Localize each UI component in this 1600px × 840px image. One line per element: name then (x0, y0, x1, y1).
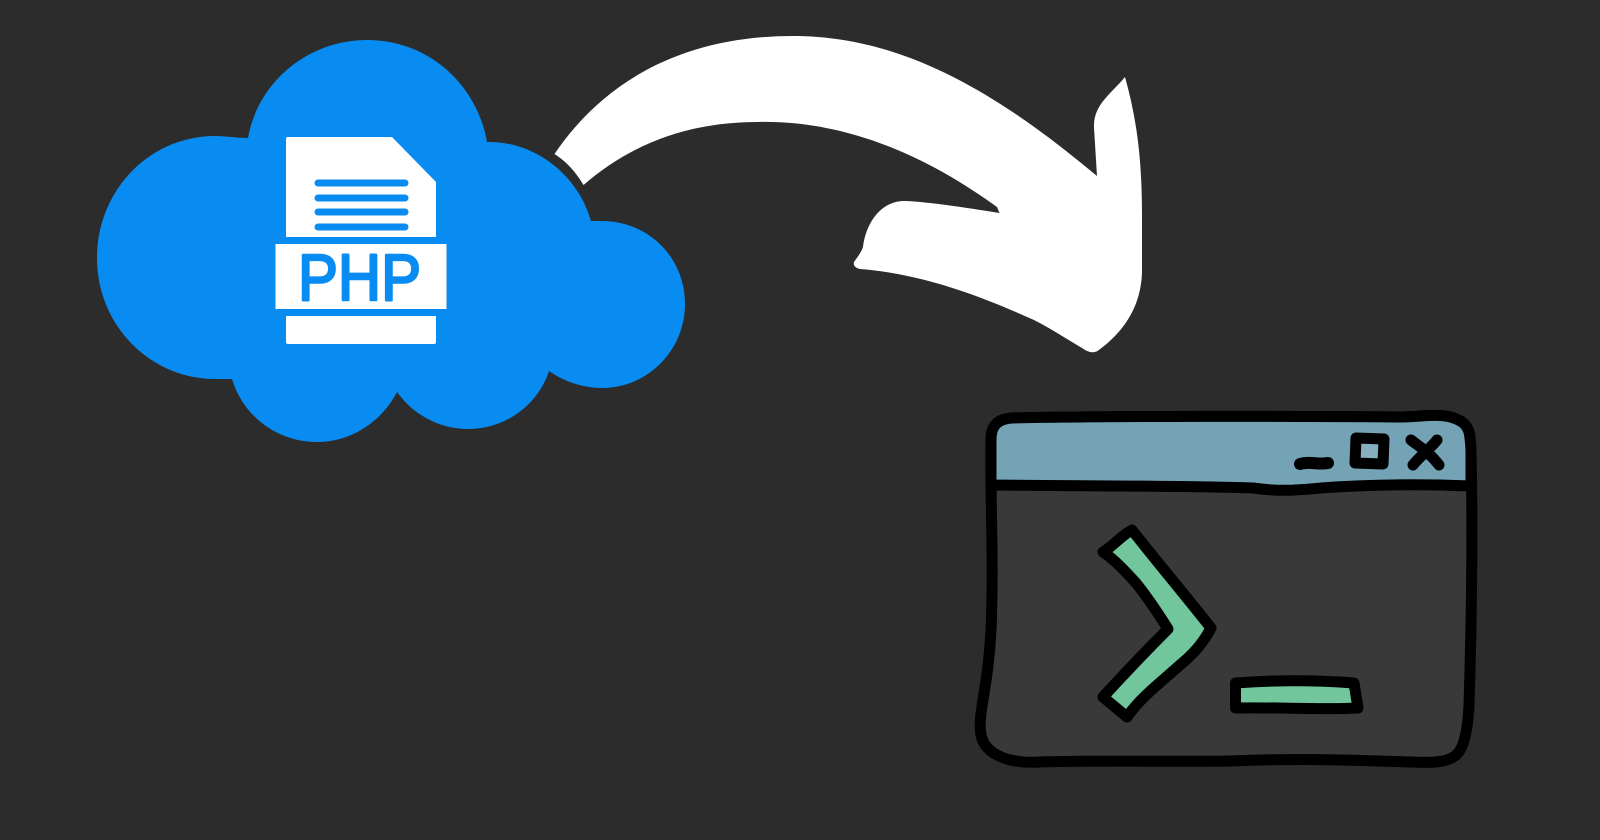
prompt chevron (1103, 530, 1211, 717)
document body (286, 137, 436, 237)
icon: terminal window (980, 415, 1472, 762)
document text lines (318, 183, 405, 227)
close button (1411, 440, 1439, 465)
cloud shape (97, 40, 685, 442)
title bar (991, 415, 1471, 490)
PHP label band (276, 244, 446, 309)
window body (980, 415, 1472, 762)
icon: blue cloud with PHP file (97, 40, 685, 442)
minimize button (1300, 463, 1328, 464)
arrow: curved white arrow from cloud to terminal (554, 36, 1142, 352)
document footer (286, 316, 436, 344)
icon: PHP document (276, 137, 446, 344)
cursor underscore (1236, 681, 1358, 709)
PHP label: PHP (298, 240, 421, 314)
maximize button (1355, 438, 1384, 464)
